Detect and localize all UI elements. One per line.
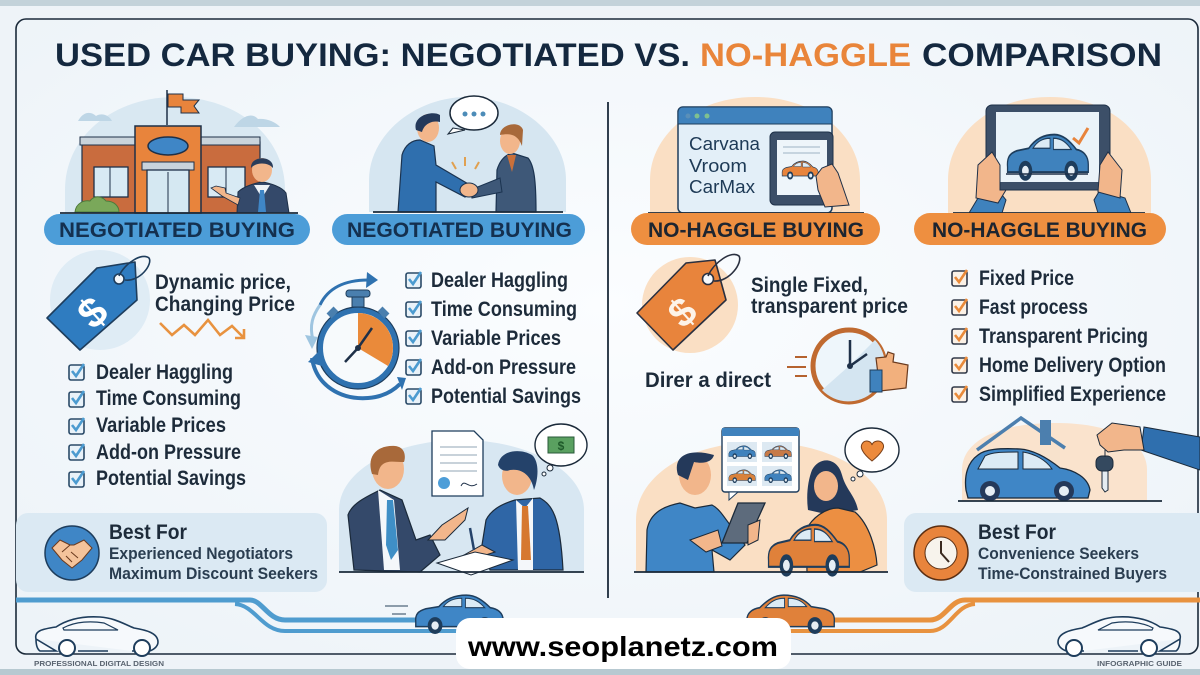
checklist: negotiated left bbox=[69, 361, 246, 490]
icon: blue price tag bbox=[47, 250, 150, 350]
checklist: no-haggle: Fixed Price bbox=[979, 267, 1074, 290]
title: NO-HAGGLE bbox=[700, 37, 911, 73]
title: USED CAR BUYING: NEGOTIATED VS. bbox=[55, 37, 690, 73]
icon: orange price tag: $ bbox=[660, 289, 706, 337]
icon: blue price tag: $ bbox=[68, 287, 117, 338]
panel: best for negotiators: Maximum Discount Seekers bbox=[109, 564, 318, 583]
text: dynamic price bbox=[155, 271, 295, 316]
panel: best for convenience: Convenience Seekers bbox=[978, 544, 1139, 563]
checklist: negotiated right: Add-on Pressure bbox=[431, 356, 576, 379]
panel divider bbox=[607, 102, 609, 598]
panel: no-haggle buying - browser: Vroom bbox=[689, 156, 747, 176]
panel: no-haggle buying - tablet bbox=[948, 97, 1151, 213]
website badge: www.seoplanetz.com bbox=[467, 631, 778, 662]
website badge bbox=[456, 618, 791, 669]
title bbox=[55, 37, 1162, 73]
text: dynamic price: Changing Price bbox=[155, 293, 295, 316]
panel: no-haggle buying - browser bbox=[648, 97, 864, 213]
panel: best for negotiators bbox=[16, 513, 327, 592]
checklist: negotiated right: Potential Savings bbox=[431, 385, 581, 408]
checklist: negotiated right bbox=[406, 269, 581, 408]
scene: home delivery with key bbox=[958, 418, 1200, 501]
icon: clock badge bbox=[914, 526, 968, 580]
text: dynamic price: Dynamic price, bbox=[155, 271, 291, 294]
text: single fixed price: Single Fixed, bbox=[751, 274, 868, 297]
checklist: negotiated left: Time Consuming bbox=[96, 387, 241, 410]
icon: right outline car bbox=[1058, 617, 1180, 656]
text: single fixed price: transparent price bbox=[751, 295, 908, 318]
pill: negotiated buying 2 bbox=[332, 214, 585, 245]
pill: no-haggle buying 2 bbox=[914, 213, 1166, 245]
checklist: negotiated right: Variable Prices bbox=[431, 327, 561, 350]
panel: best for negotiators: Experienced Negotiators bbox=[109, 544, 293, 563]
icon: orange price tag bbox=[637, 254, 740, 353]
text: direct: Direr a direct bbox=[645, 369, 771, 392]
icon: zigzag price arrow bbox=[160, 320, 244, 338]
footer label right: INFOGRAPHIC GUIDE bbox=[1097, 659, 1182, 668]
title: COMPARISON bbox=[922, 37, 1162, 73]
pill: no-haggle buying 2: NO-HAGGLE BUYING bbox=[932, 219, 1147, 242]
panel: best for convenience bbox=[904, 513, 1200, 592]
road: orange lines with car bbox=[747, 595, 1200, 634]
scene: contract negotiation: $ bbox=[558, 439, 565, 453]
checklist: no-haggle: Transparent Pricing bbox=[979, 325, 1148, 348]
panel: no-haggle buying - browser: Carvana bbox=[689, 134, 761, 154]
checklist: no-haggle: Home Delivery Option bbox=[979, 354, 1166, 377]
pill: no-haggle buying 1: NO-HAGGLE BUYING bbox=[648, 219, 864, 242]
scene: contract negotiation bbox=[339, 424, 587, 575]
icon: stopwatch with arrows bbox=[305, 272, 406, 398]
checklist: negotiated left: Add-on Pressure bbox=[96, 441, 241, 464]
icon: clock with thumbs up bbox=[787, 330, 908, 402]
icon: handshake badge bbox=[45, 526, 99, 580]
panel: best for convenience: Best For bbox=[978, 521, 1056, 544]
panel: negotiated buying - handshake bbox=[369, 96, 566, 212]
scene: online car shopping bbox=[634, 428, 899, 577]
checklist: negotiated left: Potential Savings bbox=[96, 467, 246, 490]
panel: no-haggle buying - browser: CarMax bbox=[689, 177, 755, 197]
checklist: negotiated left: Variable Prices bbox=[96, 414, 226, 437]
checklist: negotiated right: Time Consuming bbox=[431, 298, 577, 321]
checklist: negotiated right: Dealer Haggling bbox=[431, 269, 568, 292]
panel: negotiated buying - dealership bbox=[60, 90, 298, 213]
checklist: negotiated left: Dealer Haggling bbox=[96, 361, 233, 384]
checklist: no-haggle: Fast process bbox=[979, 296, 1088, 319]
footer label left: PROFESSIONAL DIGITAL DESIGN bbox=[34, 659, 164, 668]
panel: best for negotiators: Best For bbox=[109, 521, 187, 544]
pill: negotiated buying 1: NEGOTIATED BUYING bbox=[59, 219, 295, 242]
checklist: no-haggle bbox=[952, 267, 1166, 406]
text: single fixed price bbox=[751, 274, 908, 318]
panel: best for convenience: Time-Constrained Buyers bbox=[978, 564, 1167, 583]
pill: negotiated buying 1 bbox=[44, 214, 310, 245]
road: blue lines with car bbox=[16, 595, 503, 634]
pill: no-haggle buying 1 bbox=[631, 213, 880, 245]
icon: left outline car bbox=[36, 617, 158, 656]
checklist: no-haggle: Simplified Experience bbox=[979, 383, 1166, 406]
pill: negotiated buying 2: NEGOTIATED BUYING bbox=[347, 219, 572, 242]
